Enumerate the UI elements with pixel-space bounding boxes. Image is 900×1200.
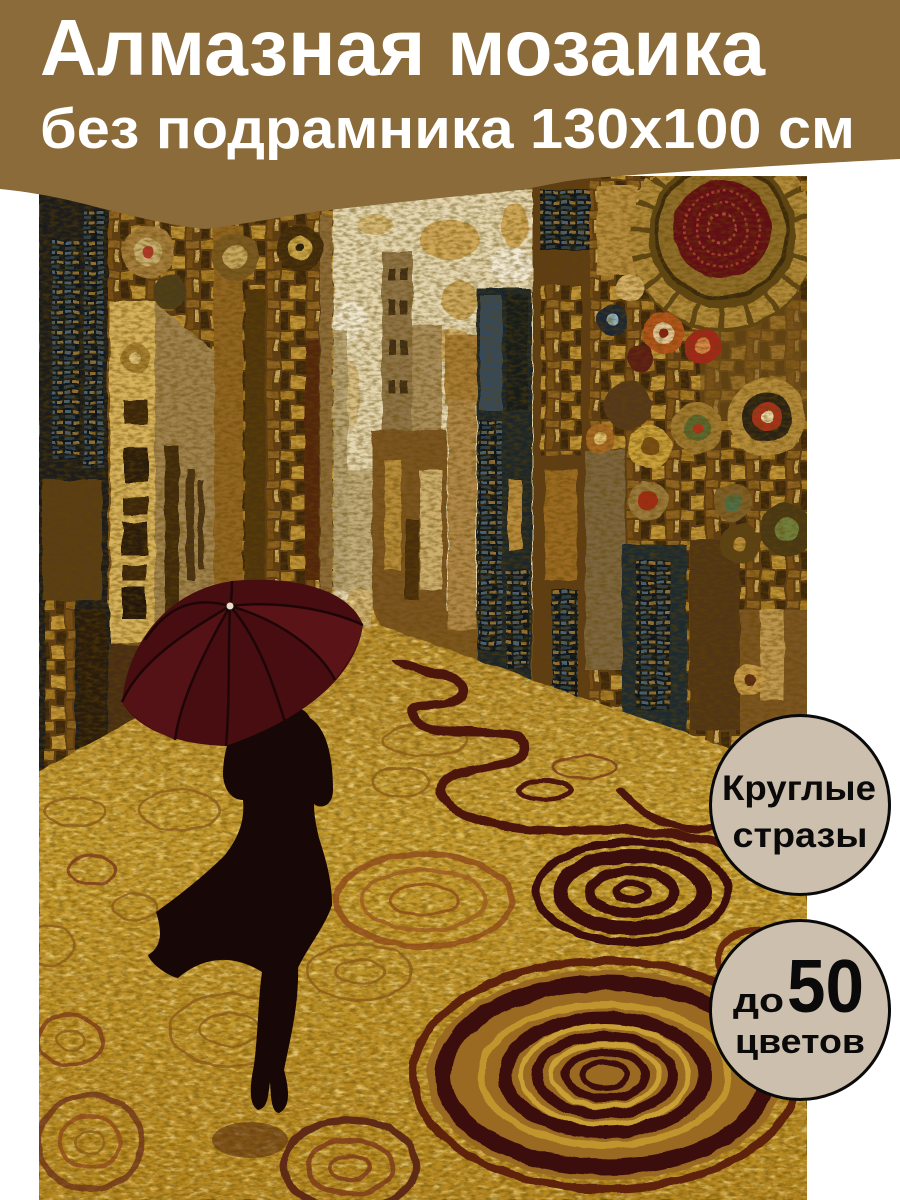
large spiral [413,930,802,1189]
badge: round rhinestones [710,716,890,894]
badge: up to 50 colours: до [733,982,784,1020]
winding red ribbon [395,660,740,850]
woman's reflection [212,1122,288,1158]
floor ripples [26,725,617,1200]
badge: up to 50 colours [710,920,890,1100]
medium spiral [536,842,728,942]
surface texture [39,176,807,1200]
cream building [108,301,214,765]
street ground [39,590,807,1200]
distant buildings [330,252,480,630]
badge: round rhinestones: Круглые [722,769,876,808]
title line 1: Алмазная мозаика [40,3,765,92]
floor patterns [26,660,802,1200]
badge: round rhinestones: стразы [732,816,868,855]
badge: up to 50 colours: цветов [735,1023,865,1061]
woman silhouette [148,707,333,1113]
right column [533,176,593,706]
umbrella [122,580,363,746]
blue tower [477,288,532,683]
sky [325,190,540,610]
right wall [585,176,810,776]
title banner [0,0,900,229]
ground highlights [39,590,807,1200]
painting: woman with umbrella in golden city [26,148,814,1200]
big medallion [630,176,807,333]
left wall [39,195,333,785]
ornament circles right [585,274,814,696]
badge: up to 50 colours: 50 [787,944,864,1028]
left ornament circles [122,225,323,309]
title line 2: без подрамника 130х100 см [40,97,855,161]
